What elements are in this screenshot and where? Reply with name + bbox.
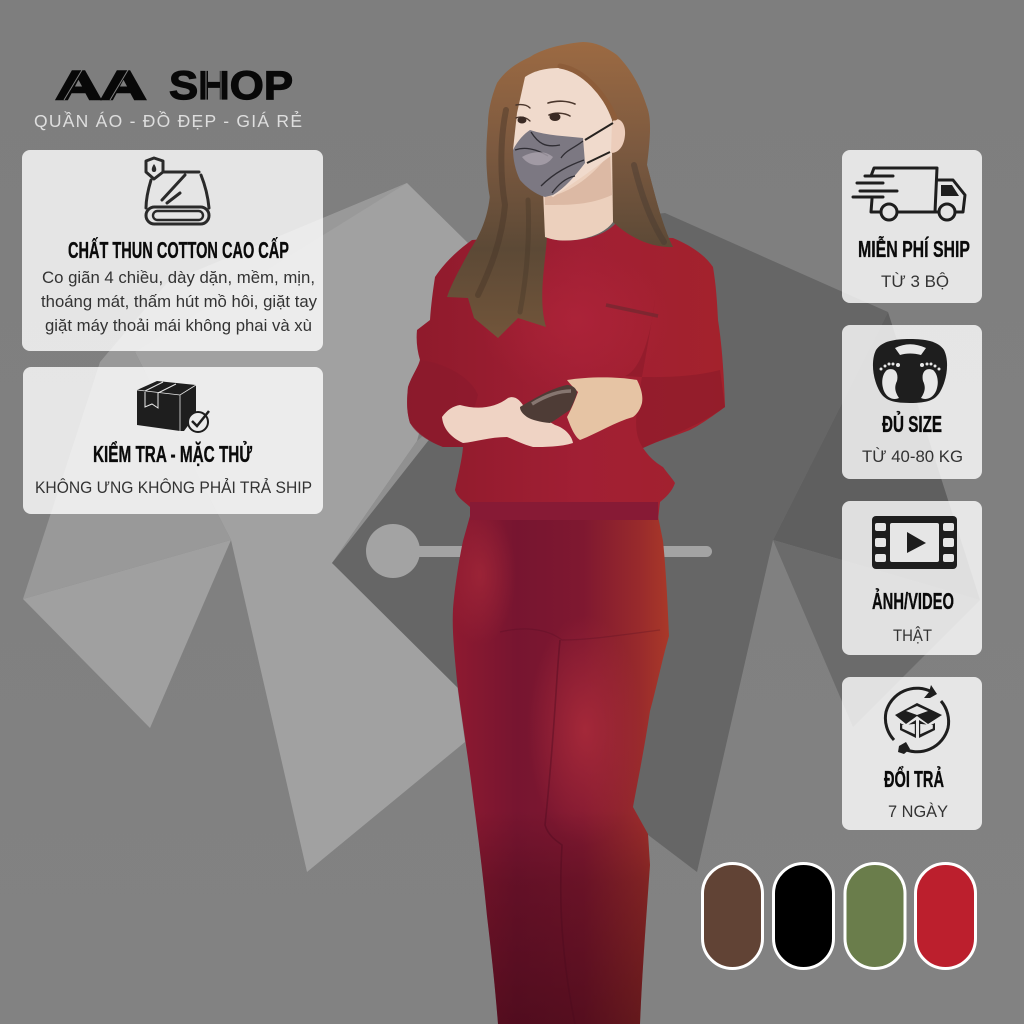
phone highlight [532, 391, 571, 404]
left sleeve shading [407, 360, 478, 447]
model photo illustration [407, 42, 725, 1024]
ear [611, 119, 625, 153]
neck shadow [545, 153, 612, 205]
right sleeve shading [625, 300, 725, 448]
icon: scale with feet [873, 339, 947, 403]
left forearm and hand [442, 397, 573, 447]
sweatshirt chest highlight [480, 245, 670, 395]
lower leg shade [478, 831, 650, 1024]
icon: film strip [872, 516, 957, 569]
thigh highlight [538, 641, 621, 820]
eye pupils [518, 113, 560, 124]
text: size: TỪ 40-80 KG [862, 447, 963, 466]
heading: free shipping: MIỄN PHÍ SHIP [858, 234, 970, 262]
right hair over shoulder [612, 150, 673, 247]
text: free shipping: TỪ 3 BỘ [881, 272, 949, 291]
text: returns: 7 NGÀY [888, 802, 948, 821]
panel: free shipping [842, 150, 982, 303]
face mask [513, 130, 585, 197]
panel: real photo and video [842, 501, 982, 655]
mask highlight [522, 152, 553, 165]
decorative circle and slider bar [366, 524, 712, 578]
phone [520, 385, 577, 423]
text: inspection description: KHÔNG ƯNG KHÔNG PHẢI TRẢ SHIP [35, 478, 312, 497]
text: fabric description [41, 269, 318, 335]
heading: returns: ĐỔI TRẢ [884, 764, 944, 792]
inner leg crease [544, 640, 564, 944]
sweatshirt print [606, 305, 658, 316]
sweatshirt hem [470, 502, 658, 520]
logo: SHOP [169, 64, 293, 108]
left hair over shoulder [447, 190, 547, 338]
logo: AA [56, 64, 146, 108]
heading: size: ĐỦ SIZE [882, 409, 942, 437]
waist crease [500, 629, 660, 640]
tagline: QUẦN ÁO - ĐỒ ĐẸP - GIÁ RẺ [34, 110, 302, 131]
icon: fabric roll [146, 158, 209, 224]
background geometric shapes [23, 183, 980, 872]
neck [543, 150, 613, 241]
right hand [567, 377, 642, 440]
text: fabric description: thoáng mát, thấm hút mồ hôi, giặt tay [41, 293, 318, 311]
logo inline details [64, 70, 221, 100]
mask pattern [515, 132, 584, 193]
heading: inspection: KIỂM TRA - MẶC THỬ [93, 439, 253, 467]
hip highlight [460, 530, 506, 620]
panel: inspection [23, 367, 323, 514]
text: real: THẬT [893, 626, 932, 645]
heading: real photo and video: ẢNH/VIDEO [872, 586, 954, 614]
panel: fabric [22, 150, 323, 351]
text: fabric description: giặt máy thoải mái không phai và xù [45, 317, 312, 335]
icon: box with check [137, 381, 209, 432]
trousers [444, 505, 672, 1024]
panel: size [842, 325, 982, 479]
heading: fabric: CHẤT THUN COTTON CAO CẤP [68, 236, 289, 263]
hair front strands [478, 66, 664, 312]
mask straps [585, 123, 613, 163]
logo [56, 64, 293, 108]
icon: delivery truck [853, 168, 965, 220]
panel: returns [842, 677, 982, 830]
eyes and brows [516, 101, 575, 121]
sweatshirt [407, 222, 725, 520]
hair back [486, 42, 673, 247]
colour swatches [702, 864, 976, 968]
icon: box with return arrows [885, 685, 949, 754]
text: fabric description: Co giãn 4 chiều, dày dặn, mềm, mịn, [42, 269, 315, 287]
face [513, 68, 612, 197]
